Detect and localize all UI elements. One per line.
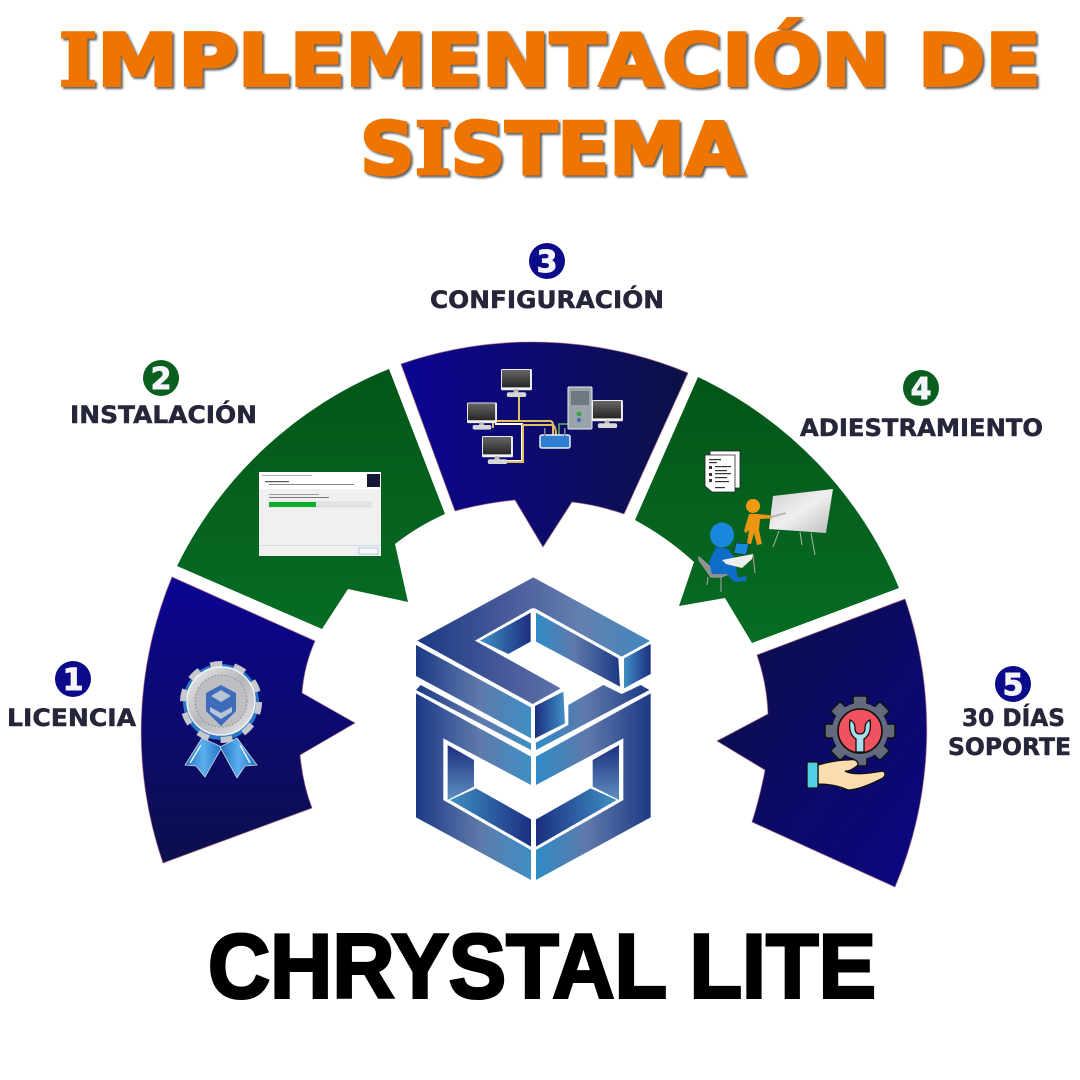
icon: medal [183,664,259,778]
title: SISTEMA [360,106,744,191]
step 5 label [948,703,1071,761]
step 2 badge: 2 [151,362,171,397]
step 3 badge: 3 [537,245,557,280]
icon: network diagram [467,369,623,464]
step 4 badge [903,370,939,407]
icon: presenter and whiteboard [744,489,833,555]
step 3 badge [529,243,565,280]
step 1 badge: 1 [63,663,83,698]
panel: step 1 licencia [141,577,355,863]
title [59,18,1041,191]
step 5 badge: 5 [1003,668,1023,703]
central logo [416,577,651,880]
panel: step 3 configuracion [401,342,688,547]
icon: installer dialog [259,472,381,556]
step 1 label: LICENCIA [7,704,136,732]
panel: step 5 soporte [717,599,927,887]
panel: step 2 instalacion [177,369,445,629]
step 5 label: SOPORTE [948,733,1071,761]
step 1 badge [55,661,91,698]
icon: hand holding gear with wrench [807,696,895,790]
step 2 label: INSTALACIÓN [70,399,257,429]
title: IMPLEMENTACIÓN DE [59,18,1041,102]
panel: step 4 adiestramiento [635,377,899,643]
icon: student with laptop [699,522,755,592]
step 4 badge: 4 [911,372,931,407]
icon: documents [705,451,740,492]
step 2 badge [143,360,179,397]
step 3 label: CONFIGURACIÓN [430,284,664,314]
product name: CHRYSTAL LITE [208,916,876,1018]
step 5 badge [995,666,1031,703]
step 5 label: 30 DÍAS [962,703,1065,732]
step 4 label: ADIESTRAMIENTO [800,414,1043,442]
